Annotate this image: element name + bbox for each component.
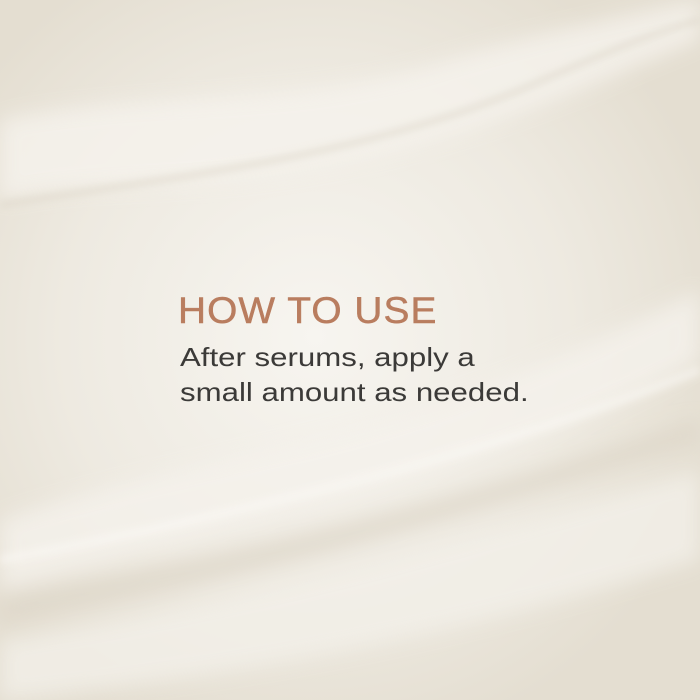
text block: instructions: small amount as needed. [180, 377, 529, 407]
text block: instructions [180, 342, 529, 407]
title: HOW TO USE [178, 290, 437, 331]
text block: instructions: After serums, apply a [180, 342, 475, 372]
